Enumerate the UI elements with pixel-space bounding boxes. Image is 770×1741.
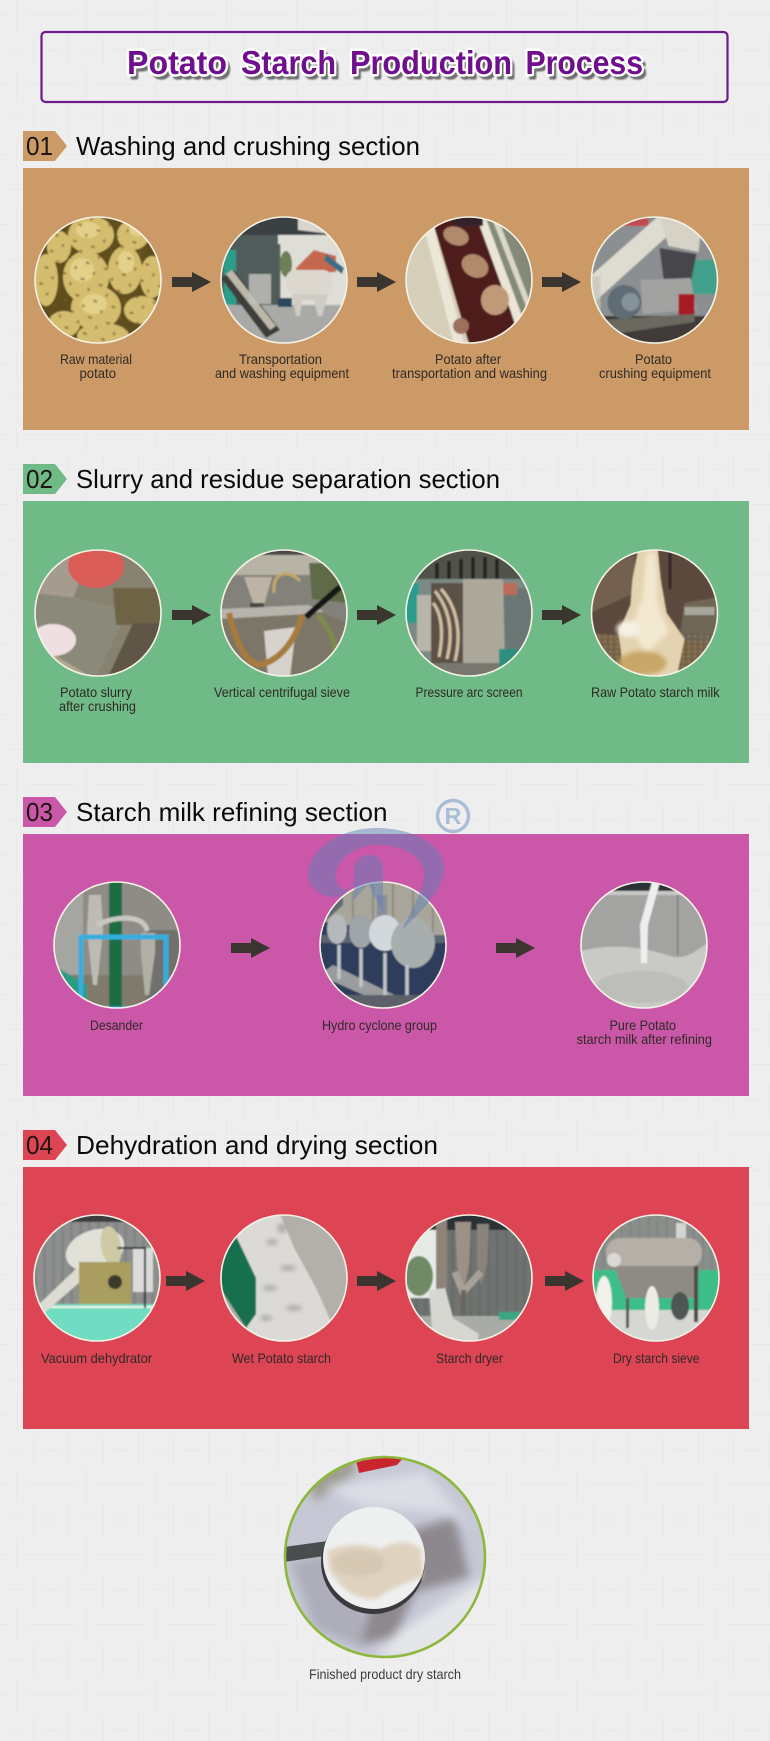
caption: raw material potato: potato bbox=[80, 365, 116, 381]
arrow bbox=[542, 605, 581, 625]
photo: potato slurry after crushing bbox=[30, 544, 162, 677]
photo: raw potato starch milk bbox=[590, 549, 718, 677]
caption: potato slurry after crushing: Potato slurry bbox=[60, 684, 132, 700]
photo: finished product dry starch bbox=[284, 1456, 486, 1658]
caption: transportation and washing equipment: and washing equipment bbox=[215, 365, 349, 381]
title banner: Potato bbox=[127, 44, 227, 81]
caption: raw material potato: Raw material bbox=[60, 351, 132, 367]
photo: wet potato starch bbox=[220, 1214, 348, 1342]
caption: finished product dry starch: Finished product dry starch bbox=[309, 1666, 461, 1682]
arrow bbox=[166, 1271, 205, 1291]
caption: potato slurry after crushing: after crushing bbox=[59, 698, 136, 714]
caption: vacuum dehydrator: Vacuum dehydrator bbox=[41, 1350, 152, 1366]
section 04 heading: 04 bbox=[26, 1130, 53, 1160]
caption: potato after transportation and washing: transportation and washing bbox=[392, 365, 547, 381]
registered trademark mark bbox=[438, 800, 468, 832]
registered trademark mark: R bbox=[444, 803, 462, 829]
title banner bbox=[42, 32, 728, 102]
caption: starch dryer: Starch dryer bbox=[436, 1350, 503, 1366]
section 02 heading: 02 bbox=[26, 464, 53, 494]
caption: dry starch sieve: Dry starch sieve bbox=[613, 1350, 700, 1366]
panel: slurry and residue separation bbox=[23, 501, 749, 763]
photo: potato crushing equipment bbox=[590, 216, 720, 346]
photo: vertical centrifugal sieve bbox=[220, 549, 348, 677]
caption: raw material potato bbox=[60, 351, 132, 381]
photo: raw potatoes bbox=[34, 216, 164, 349]
title banner: Starch bbox=[244, 48, 339, 85]
title banner: Production bbox=[353, 48, 515, 85]
caption: potato crushing equipment: Potato bbox=[635, 351, 672, 367]
photo: desander bbox=[53, 881, 181, 1011]
arrow bbox=[357, 272, 396, 292]
arrow bbox=[357, 1271, 396, 1291]
arrow bbox=[172, 605, 211, 625]
photo: pure potato starch milk bbox=[580, 881, 708, 1009]
caption: desander: Desander bbox=[90, 1017, 143, 1033]
caption: raw potato starch milk: Raw Potato starch milk bbox=[591, 684, 720, 700]
panel: starch milk refining bbox=[23, 834, 749, 1096]
section 02 heading: Slurry and residue separation section bbox=[76, 464, 500, 494]
photo: transportation and washing equipment bbox=[220, 216, 348, 345]
caption: potato crushing equipment: crushing equipment bbox=[599, 365, 711, 381]
caption: transportation and washing equipment bbox=[215, 351, 349, 381]
section 01 heading: 01 bbox=[26, 131, 53, 161]
photo: vacuum dehydrator bbox=[33, 1214, 161, 1344]
caption: pure potato starch milk after refining bbox=[577, 1017, 712, 1047]
title banner: Production bbox=[350, 44, 512, 81]
caption: pure potato starch milk after refining: Pure Potato bbox=[610, 1017, 676, 1033]
arrow bbox=[172, 272, 211, 292]
caption: wet potato starch: Wet Potato starch bbox=[232, 1350, 331, 1366]
arrow bbox=[542, 272, 581, 292]
caption: pressure arc screen: Pressure arc screen bbox=[416, 684, 522, 700]
photo: potato after washing bbox=[405, 216, 533, 344]
caption: potato crushing equipment bbox=[599, 351, 711, 381]
section 03 heading: 03 bbox=[26, 797, 53, 827]
caption: transportation and washing equipment: Transportation bbox=[239, 351, 322, 367]
arrow bbox=[496, 938, 535, 958]
title banner: Potato bbox=[130, 48, 230, 85]
watermark logo bbox=[308, 828, 444, 930]
title banner: Process bbox=[526, 44, 643, 81]
caption: pure potato starch milk after refining: starch milk after refining bbox=[577, 1031, 712, 1047]
arrow bbox=[231, 938, 270, 958]
arrow bbox=[357, 605, 396, 625]
title banner: Starch bbox=[241, 44, 336, 81]
photo: pressure arc screen bbox=[405, 549, 533, 679]
panel: dehydration and drying bbox=[23, 1167, 749, 1429]
section 03 heading: Starch milk refining section bbox=[76, 797, 388, 827]
arrow bbox=[545, 1271, 584, 1291]
section 01 heading: Washing and crushing section bbox=[76, 131, 420, 161]
section 04 heading: Dehydration and drying section bbox=[76, 1130, 438, 1160]
photo: hydro cyclone group bbox=[319, 881, 447, 1011]
title banner: Process bbox=[528, 48, 646, 85]
caption: potato after transportation and washing bbox=[392, 351, 547, 381]
caption: hydro cyclone group: Hydro cyclone group bbox=[322, 1017, 437, 1033]
caption: vertical centrifugal sieve: Vertical centrifugal sieve bbox=[214, 684, 350, 700]
panel: washing and crushing bbox=[23, 168, 749, 430]
caption: potato slurry after crushing bbox=[59, 684, 136, 714]
photo: dry starch sieve bbox=[592, 1214, 720, 1342]
photo: starch dryer bbox=[405, 1214, 533, 1342]
caption: potato after transportation and washing: Potato after bbox=[435, 351, 501, 367]
